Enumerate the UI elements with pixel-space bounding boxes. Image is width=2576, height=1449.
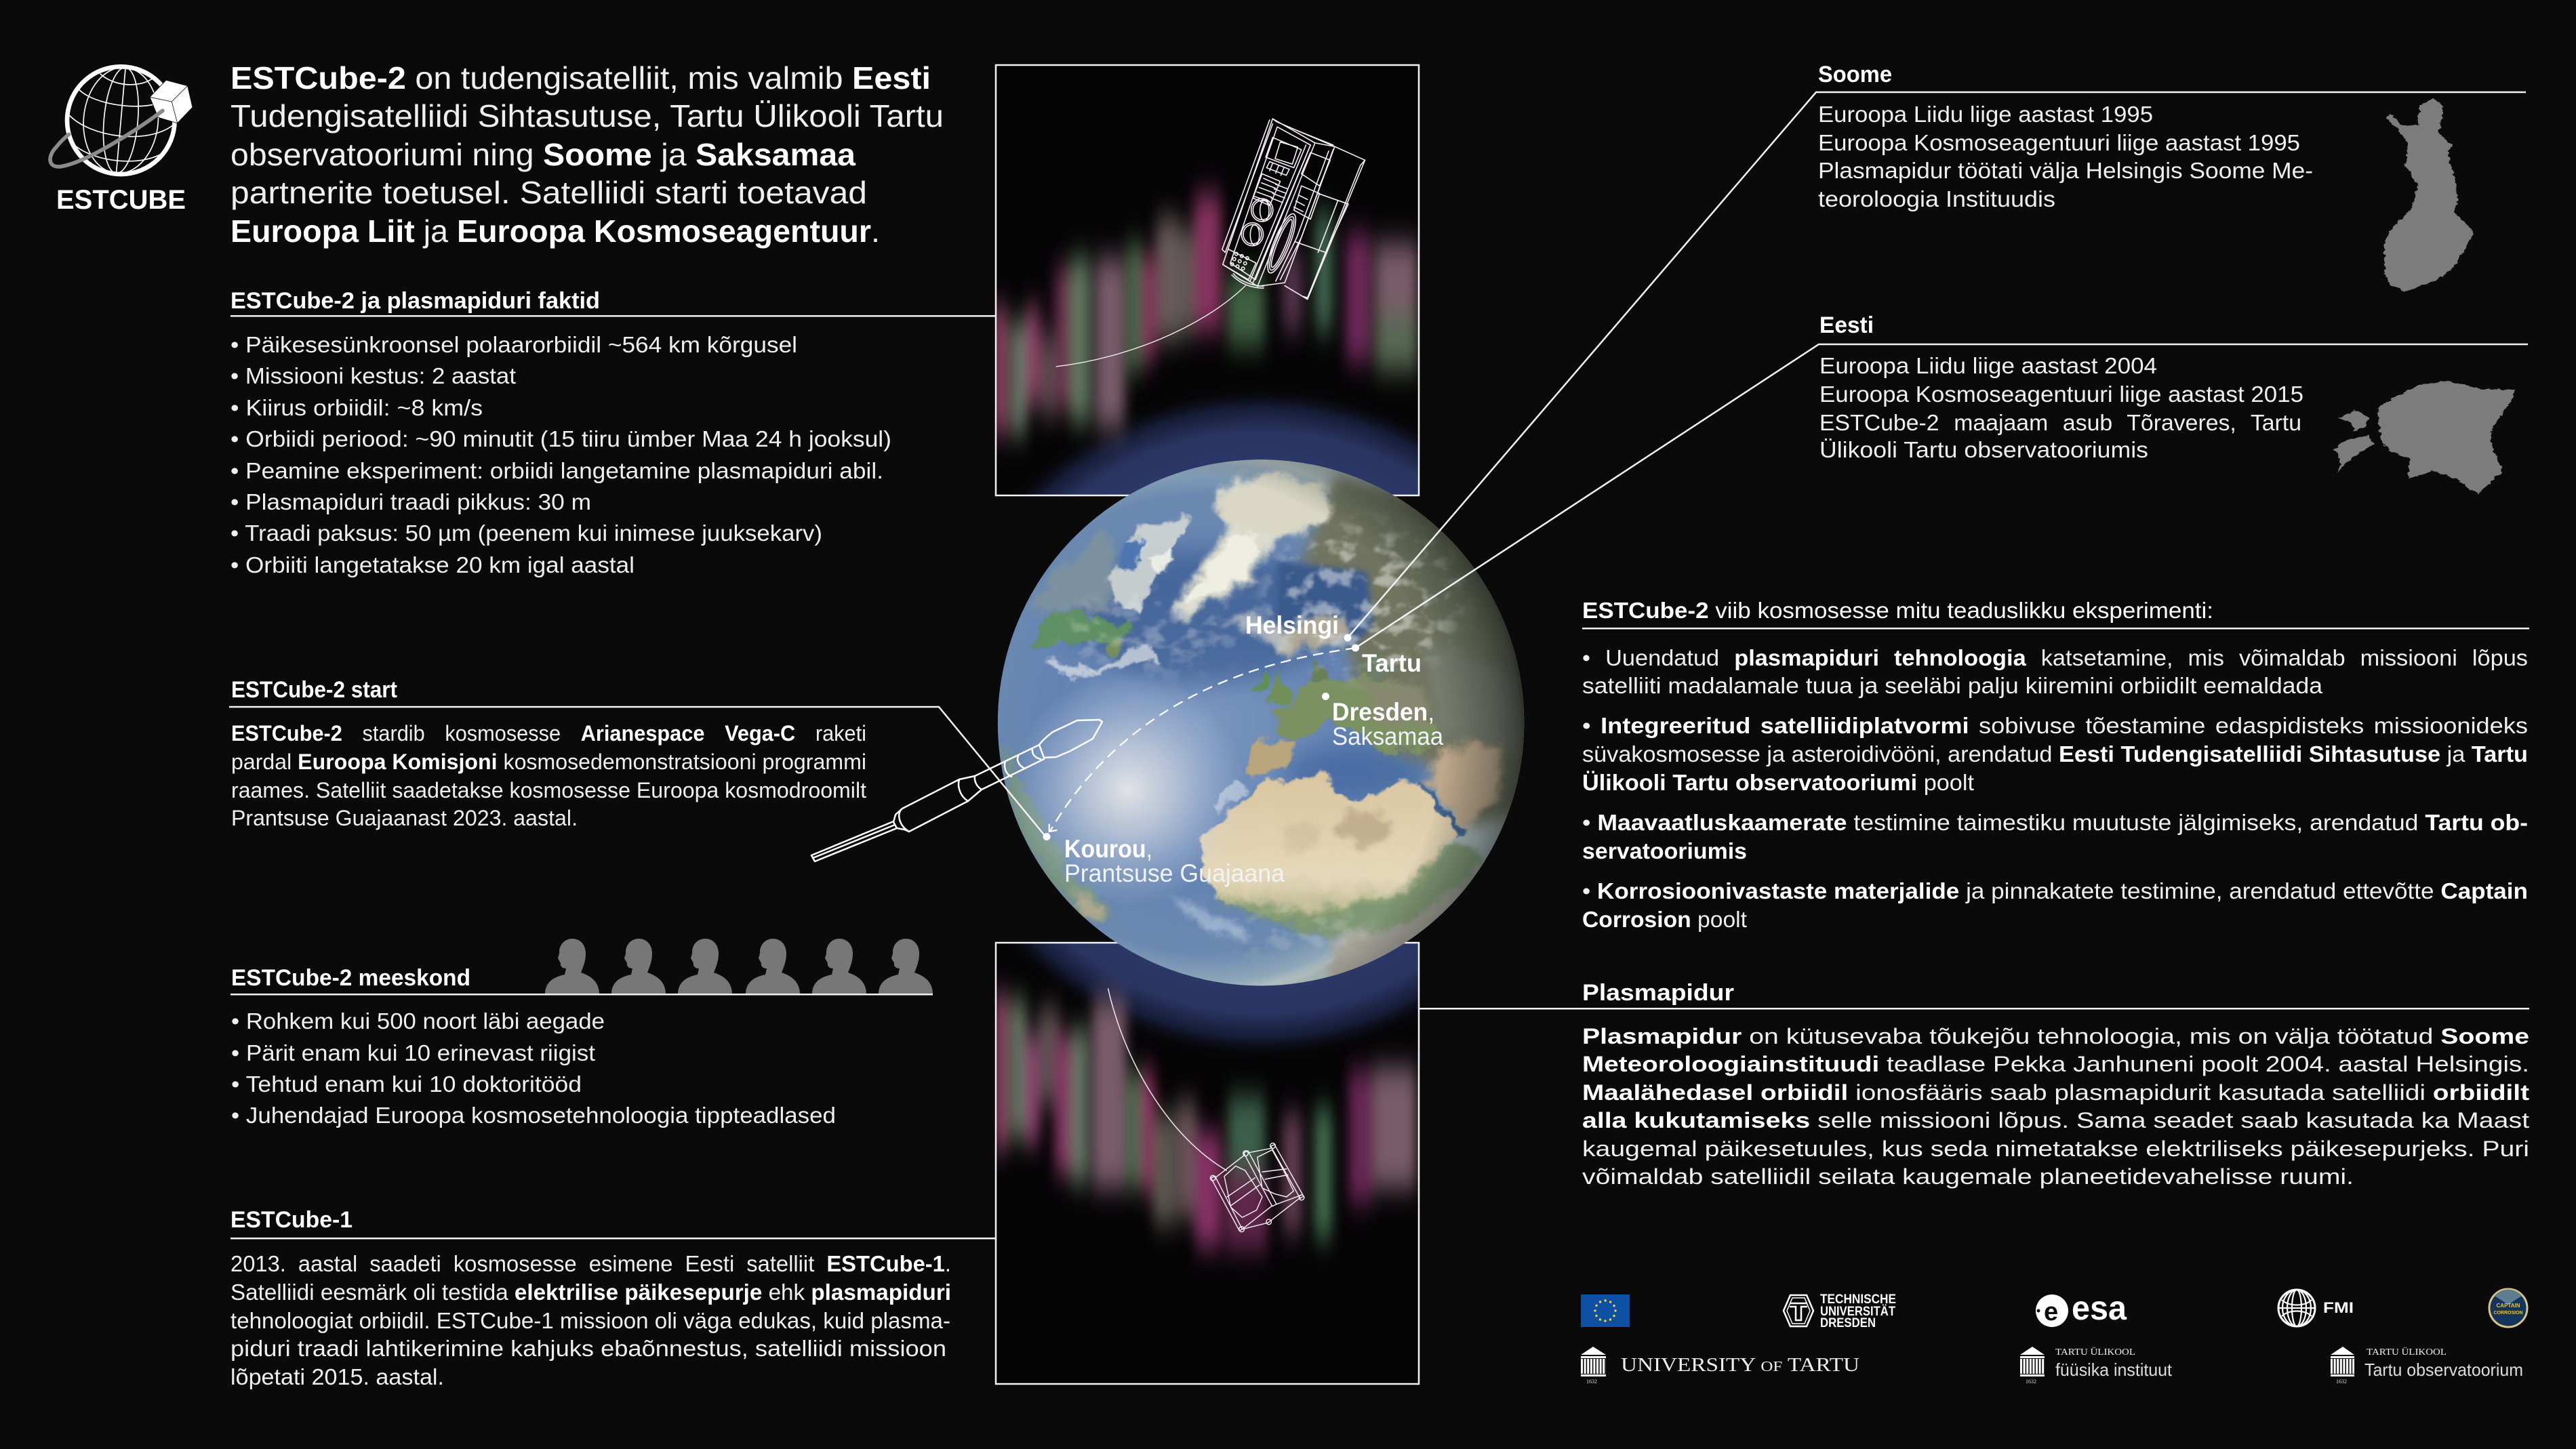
callout line: launch section to Kourou — [229, 707, 1046, 837]
section: ESTCube-2 facts: • Päikesesünkroonsel polaarorbiidil ~564 km kõrgusel — [230, 332, 797, 357]
section: ESTCube-2 launch: raames. Satelliit saadetakse kosmosesse Euroopa kosmodroomilt — [231, 778, 866, 802]
logo: TU Dresden: UNIVERSITÄT — [1820, 1305, 1895, 1319]
location labels — [1064, 611, 1443, 887]
section: Estonia: Eesti — [1819, 312, 1874, 338]
section: ESTCube-2 facts — [230, 288, 996, 577]
section: team: ESTCube-2 meeskond — [231, 965, 470, 991]
section: plasma brake: alla kukutamiseks selle missiooni lõpus. Sama seadet saab kasutada ka Maast — [1582, 1108, 2529, 1132]
section: experiments: Corrosion poolt — [1582, 907, 1747, 932]
North America — [1031, 609, 1133, 648]
section: Finland: Euroopa Liidu liige aastast 1995 — [1818, 102, 2153, 127]
section: Estonia: ESTCube-2 maajaam asub Tõraveres, Tartu — [1819, 410, 2301, 435]
logo: FMI — [2278, 1290, 2354, 1326]
section: ESTCube-2 facts: • Missiooni kestus: 2 aastat — [230, 363, 516, 388]
location labels: Kourou, — [1064, 835, 1152, 863]
section: ESTCube-1: ESTCube-1 — [230, 1207, 353, 1233]
icon: map of Estonia — [2333, 381, 2515, 494]
section: ESTCube-2 facts: ESTCube-2 ja plasmapiduri faktid — [230, 288, 600, 314]
logo: ESTCube — [50, 63, 193, 215]
logo: University of Tartu: 1632 — [1586, 1379, 1597, 1385]
logo: ESA: esa — [2072, 1289, 2127, 1327]
section: experiments: satelliiti madalamale tuua ja seeläbi palju kiiremini orbiidilt eemaldada — [1582, 673, 2323, 698]
section: experiments: • Maavaatluskaamerate testimine taimestiku muutuste jälgimiseks, arendatud Tartu ob- — [1582, 810, 2528, 835]
icon: rocket — [811, 720, 1102, 861]
section: team — [230, 939, 933, 1128]
section: ESTCube-2 facts: • Traadi paksus: 50 µm (peenem kui inimese juuksekarv) — [230, 521, 822, 546]
logo: European Union flag — [1581, 1294, 1630, 1327]
logo: Tartu Observatory: 1632 — [2336, 1379, 2347, 1385]
Europe — [1273, 675, 1436, 752]
section: ESTCube-1: piduri traadi lahtikerimine kahjuks ebaõnnestus, satelliidi missioon — [230, 1336, 946, 1361]
panel: bottom image box with ESTCube-1 and aurora — [995, 942, 1420, 1385]
intro text: Euroopa Liit ja Euroopa Kosmoseagentuur. — [230, 213, 880, 249]
logo: Captain Corrosion — [2489, 1289, 2527, 1327]
logo: TU Dresden: TECHNISCHE — [1820, 1292, 1896, 1307]
section: plasma brake — [1419, 980, 2529, 1189]
section: Estonia: Ülikooli Tartu observatooriumis — [1819, 437, 2148, 462]
logo: Captain Corrosion: CORROSION — [2493, 1311, 2523, 1315]
intro text: ESTCube-2 on tudengisatelliit, mis valmib Eesti — [230, 60, 931, 96]
section: ESTCube-2 facts: • Kiirus orbiidil: ~8 km/s — [230, 395, 483, 420]
section: experiments: süvakosmosesse ja asteroidivööni, arendatud Eesti Tudengisatelliidi Sihtasutuse ja Tartu — [1582, 741, 2528, 767]
section: plasma brake: Meteoroloogiainstituudi teadlase Pekka Janhuneni poolt 2004. aastal Helsingis. — [1582, 1052, 2529, 1076]
logo: TU Dresden: DRESDEN — [1820, 1316, 1876, 1330]
section: ESTCube-1: tehnoloogiat orbiidil. ESTCube-1 missioon oli väga edukas, kuid plasma- — [230, 1308, 950, 1333]
section: Estonia — [1819, 312, 2515, 494]
Greenland ice and cloud — [1175, 476, 1331, 618]
logo: Tartu Observatory — [2331, 1346, 2523, 1385]
section: Finland: Euroopa Kosmoseagentuuri liige aastast 1995 — [1818, 130, 2300, 155]
section: ESTCube-2 facts: • Orbiiti langetatakse 20 km igal aastal — [230, 552, 635, 577]
logo: ESA — [2036, 1289, 2127, 1327]
location markers — [1043, 634, 1359, 840]
section: experiments: servatooriumis — [1582, 838, 1747, 863]
section: Estonia: Euroopa Liidu liige aastast 2004 — [1819, 353, 2157, 378]
logo: FMI: FMI — [2323, 1299, 2354, 1316]
section: ESTCube-1: Satelliidi eesmärk oli testida elektrilise päikesepurje ehk plasmapiduri — [230, 1280, 951, 1305]
limb shading — [998, 460, 1524, 985]
logo: Institute of Physics: TARTU ÜLIKOOL — [2055, 1346, 2135, 1358]
section: ESTCube-1: lõpetati 2015. aastal. — [230, 1364, 444, 1389]
logo: Institute of Physics: füüsika instituut — [2055, 1360, 2173, 1380]
north-east haze over Eurasia — [1301, 474, 1536, 828]
arctic ice — [1107, 516, 1190, 613]
Africa — [1201, 772, 1455, 922]
section: Estonia: Euroopa Kosmoseagentuuri liige aastast 2015 — [1819, 382, 2303, 407]
location labels: Prantsuse Guajaana — [1064, 859, 1285, 887]
icon: ESTCube-2 satellite wireframe — [1056, 119, 1365, 367]
panel: top image box with satellite and aurora — [995, 64, 1420, 496]
icon: ESTCube-1 satellite wireframe — [1108, 989, 1304, 1232]
section: experiments — [1582, 598, 2529, 932]
intro text: observatooriumi ning Soome ja Saksamaa — [230, 137, 856, 172]
logo: TU Dresden — [1784, 1292, 1896, 1330]
section: plasma brake: Plasmapidur — [1582, 980, 1734, 1006]
logo: Institute of Physics — [2020, 1346, 2173, 1385]
intro text: partnerite toetusel. Satelliidi starti toetavad — [230, 175, 867, 210]
section: ESTCube-2 launch: pardal Euroopa Komisjoni kosmosedemonstratsiooni programmi — [231, 750, 866, 774]
earth globe — [990, 460, 1543, 1014]
intro text: Tudengisatelliidi Sihtasutuse, Tartu Ülikooli Tartu — [230, 98, 944, 134]
location labels: Saksamaa — [1332, 722, 1443, 750]
logo: University of Tartu — [1581, 1347, 1859, 1385]
logo: Captain Corrosion: CAPTAIN — [2497, 1303, 2520, 1309]
section: plasma brake: Plasmapidur on kütusevaba tõukejõu tehnoloogia, mis on välja töötatud Soome — [1582, 1024, 2529, 1048]
section: experiments: • Uuendatud plasmapiduri tehnoloogia katsetamine, mis võimaldab missiooni lõpus — [1582, 645, 2528, 670]
section: Finland — [1818, 62, 2474, 291]
section: ESTCube-2 facts: • Peamine eksperiment: orbiidi langetamine plasmapiduri abil. — [230, 458, 883, 483]
trajectory: dashed arc from Tartu to Kourou — [1049, 648, 1356, 832]
location labels: Helsingi — [1245, 611, 1339, 639]
section: Finland: Plasmapidur töötati välja Helsingis Soome Me- — [1818, 158, 2313, 183]
section: ESTCube-2 facts: • Orbiidi periood: ~90 minutit (15 tiiru ümber Maa 24 h jooksul) — [230, 426, 891, 451]
logo: Tartu Observatory: Tartu observatoorium — [2364, 1360, 2523, 1380]
section: experiments: Ülikooli Tartu observatooriumi poolt — [1582, 770, 1974, 795]
logo: University of Tartu: UNIVERSITY OF TARTU — [1621, 1355, 1859, 1376]
intro text — [230, 60, 944, 249]
scattered clouds — [1225, 613, 1294, 655]
section: plasma brake: võimaldab satelliidil seilata kaugemale planeetidevahelisse ruumi. — [1582, 1164, 2354, 1189]
section: ESTCube-2 launch: ESTCube-2 start — [231, 677, 397, 703]
section: experiments: • Integreeritud satelliidiplatvormi sobivuse tõestamine edaspidisteks missioonideks — [1582, 713, 2528, 738]
logo: Institute of Physics: 1632 — [2026, 1379, 2036, 1385]
icon: map of Finland — [2384, 98, 2474, 291]
Scandinavia and clouds — [1273, 613, 1350, 655]
section: plasma brake: Maalähedasel orbiidil ionosfääris saab plasmapidurit kasutada satelliidi orbiidilt — [1582, 1080, 2529, 1105]
section: ESTCube-2 launch: Prantsuse Guajaanast 2023. aastal. — [231, 806, 578, 830]
section: team: • Juhendajad Euroopa kosmosetehnoloogia tippteadlased — [231, 1103, 836, 1128]
callout lines: Finland and Estonia — [1348, 92, 2528, 648]
location labels: Dresden, — [1332, 698, 1434, 726]
sun glint — [1011, 672, 1246, 907]
partner logos — [1581, 1289, 2527, 1385]
South America — [1000, 737, 1111, 924]
section: team: • Tehtud enam kui 10 doktoritööd — [231, 1072, 582, 1097]
section: team: • Rohkem kui 500 noort läbi aegade — [231, 1008, 605, 1034]
logo: ESTCube: ESTCUBE — [56, 185, 186, 215]
section: ESTCube-2 launch: ESTCube-2 stardib kosmosesse Arianespace Vega-C raketi — [231, 721, 866, 746]
section: plasma brake: kaugemal päikesetuules, kus seda nimetatakse elektriliseks päikesepurjeks. Puri — [1582, 1137, 2529, 1161]
location labels: Tartu — [1362, 649, 1422, 677]
section: Finland: teoroloogia Instituudis — [1818, 186, 2055, 211]
section: ESTCube-1: 2013. aastal saadeti kosmosesse esimene Eesti satelliit ESTCube-1. — [230, 1251, 951, 1276]
icon: team silhouettes — [545, 939, 933, 994]
section: experiments: ESTCube-2 viib kosmosesse mitu teaduslikku eksperimenti: — [1582, 598, 2213, 623]
logo: ESA: e — [2044, 1298, 2058, 1326]
logo: Tartu Observatory: TARTU ÜLIKOOL — [2367, 1346, 2447, 1358]
section: ESTCube-1 — [230, 1207, 996, 1389]
section: experiments: • Korrosioonivastaste materjalide ja pinnakatete testimine, arendatud ettevõtte Captain — [1582, 878, 2528, 903]
Arabia — [1426, 741, 1502, 828]
section: team: • Pärit enam kui 10 erinevast riigist — [231, 1040, 595, 1065]
section: ESTCube-2 facts: • Plasmapiduri traadi pikkus: 30 m — [230, 489, 591, 514]
section: ESTCube-2 launch — [231, 677, 866, 830]
section: Finland: Soome — [1818, 62, 1892, 87]
